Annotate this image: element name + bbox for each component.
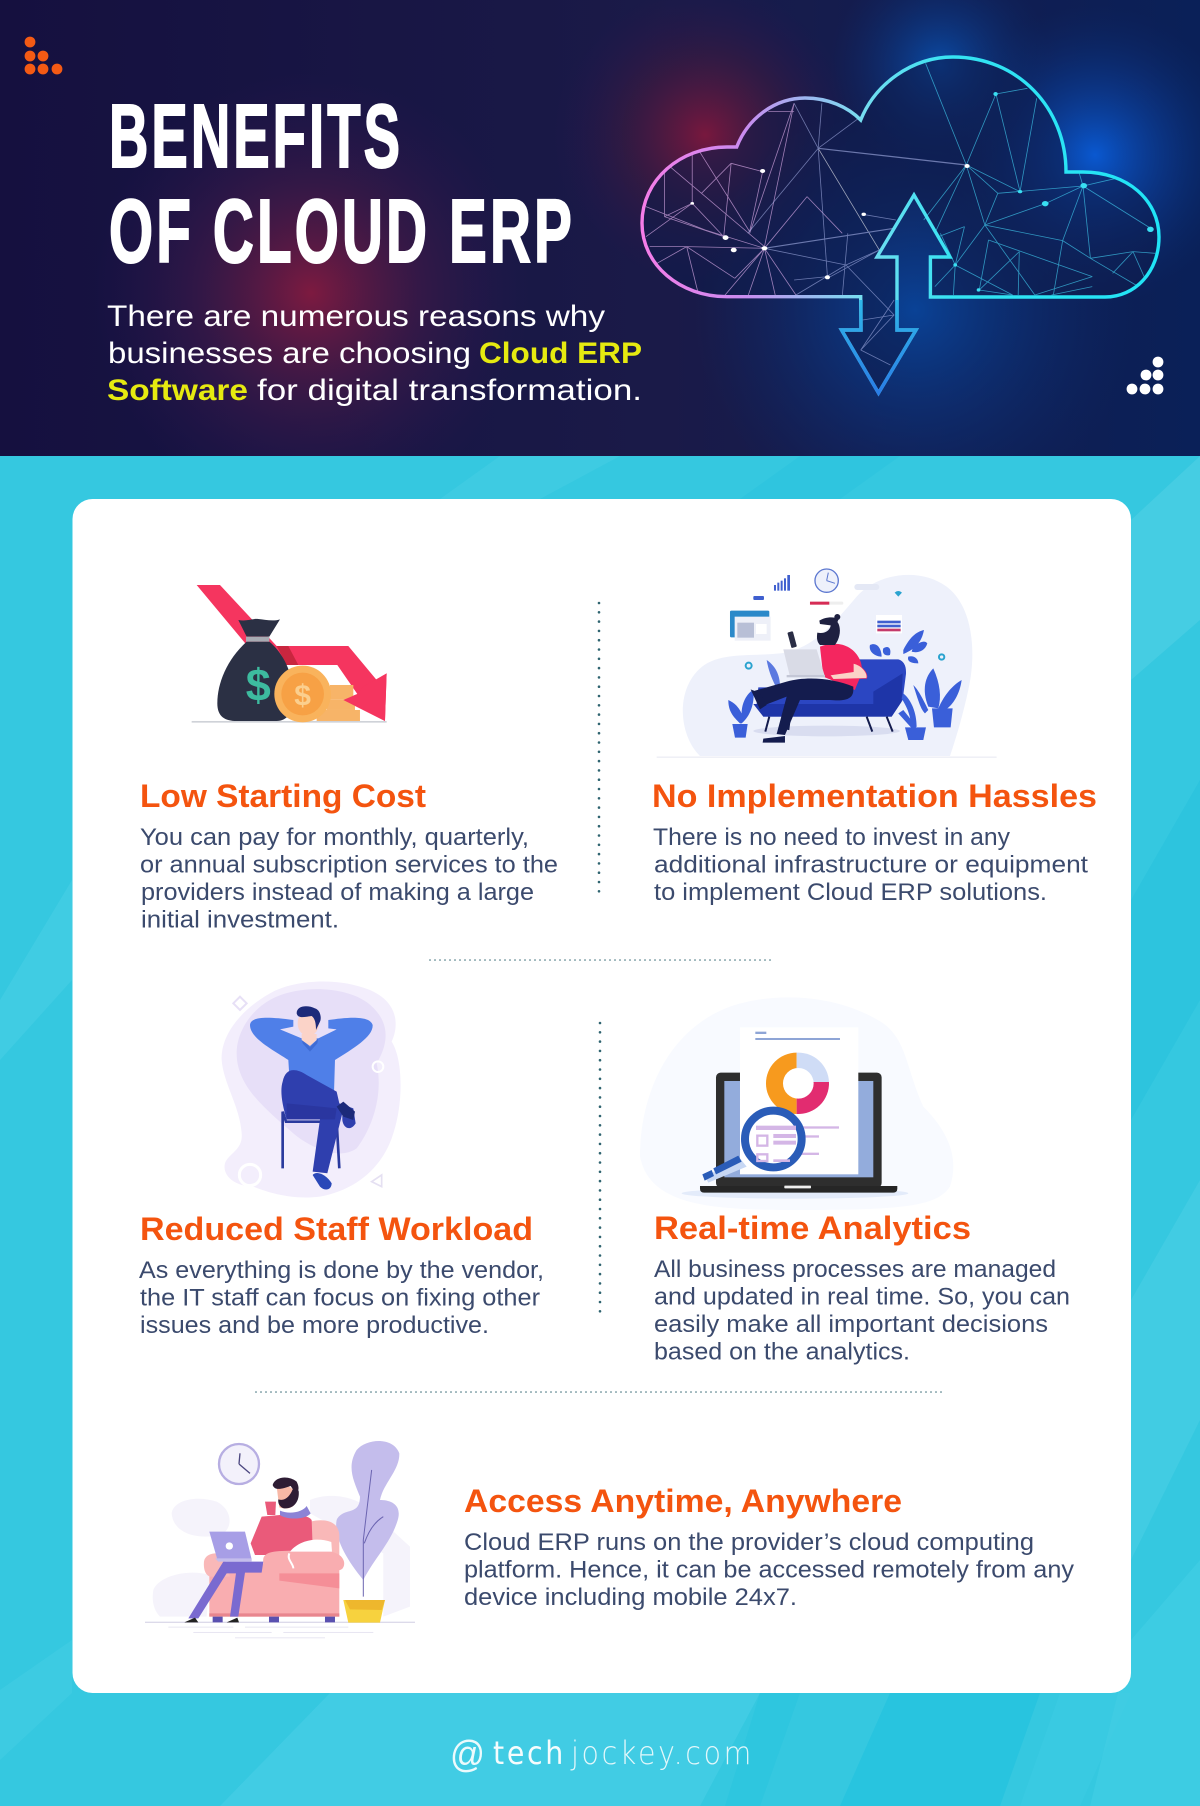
footer: techjockey logo: tech [493, 1734, 566, 1772]
divider dots [256, 603, 944, 1392]
subtitle text: Software [107, 374, 248, 407]
background: cyan streaked panel [0, 456, 1200, 1806]
armchair [310, 1520, 339, 1557]
icon: white dots logo [1127, 357, 1163, 394]
sofa [757, 659, 906, 717]
icon: orange dots logo [25, 37, 62, 74]
cat [290, 1540, 332, 1552]
text block: Low Starting Cost [140, 824, 558, 934]
clock [219, 1444, 259, 1484]
icon: money bag with falling arrow: $ [246, 660, 271, 711]
panel: white card [72, 499, 1131, 1693]
network lines [646, 63, 1155, 365]
cloud illustration with arrows [642, 57, 1159, 393]
icon: laptop with analytics report [640, 997, 953, 1210]
subtitle text: There are numerous reasons why [107, 300, 605, 333]
text block: No Implementation Hassles: There is no need to invest in any [653, 824, 1010, 851]
text block: Low Starting Cost: You can pay for monthly, quarterly, [140, 824, 529, 851]
heading: No Implementation Hassles: No Implementation Hassles [652, 778, 1097, 814]
text block: Real-time Analytics [654, 1256, 1070, 1366]
text block: Low Starting Cost: or annual subscription services to the [140, 852, 558, 878]
icon: man with laptop on armchair [145, 1441, 415, 1638]
chair [283, 1112, 339, 1168]
plant [336, 1441, 399, 1580]
legs [281, 1070, 356, 1173]
header panel [0, 0, 1200, 456]
head [298, 1011, 319, 1036]
footer: techjockey logo: @ [450, 1734, 485, 1776]
text block: Low Starting Cost: providers instead of making a large [141, 879, 534, 906]
title: OF CLOUD ERP [109, 182, 575, 282]
floating icons [815, 569, 838, 592]
title [109, 87, 575, 282]
shirt and arms [250, 1018, 373, 1093]
cloud outline [642, 57, 1159, 393]
person torso [251, 1515, 313, 1555]
footer: techjockey logo: jockey.com [570, 1734, 754, 1772]
icon: relaxed man on chair [222, 982, 401, 1198]
heading: Real-time Analytics: Real-time Analytics [654, 1210, 971, 1246]
subtitle text: for digital transformation. [257, 374, 642, 407]
text block: Access Anytime, Anywhere: Cloud ERP runs on the provider’s cloud computing [464, 1529, 1034, 1556]
footer: techjockey logo [450, 1734, 754, 1776]
text block: No Implementation Hassles: to implement Cloud ERP solutions. [654, 879, 1047, 906]
icon: money bag with falling arrow [192, 585, 387, 723]
subtitle text [107, 300, 642, 407]
text block: Access Anytime, Anywhere: platform. Hence, it can be accessed remotely from any [464, 1556, 1074, 1584]
text block: Real-time Analytics: based on the analytics. [654, 1338, 910, 1366]
text block: Low Starting Cost: initial investment. [141, 906, 339, 934]
text block: No Implementation Hassles: additional infrastructure or equipment [654, 852, 1088, 878]
text block: Reduced Staff Workload: As everything is done by the vendor, [139, 1257, 544, 1284]
plants [728, 630, 962, 740]
text block: No Implementation Hassles [653, 824, 1088, 906]
text block: Real-time Analytics: and updated in real time. So, you can [654, 1284, 1070, 1310]
text block: Real-time Analytics: All business processes are managed [654, 1256, 1056, 1283]
icon: money bag with falling arrow: $ [294, 680, 311, 713]
person [820, 644, 862, 690]
down arrow tint [842, 300, 916, 393]
text block: Access Anytime, Anywhere: device including mobile 24x7. [464, 1584, 797, 1611]
heading: Access Anytime, Anywhere: Access Anytime, Anywhere [464, 1483, 902, 1519]
text block: Real-time Analytics: easily make all important decisions [654, 1311, 1048, 1338]
icon: man on sofa with laptop [657, 569, 997, 758]
text block: Reduced Staff Workload: the IT staff can focus on fixing other [140, 1284, 540, 1312]
text block: Reduced Staff Workload: issues and be more productive. [140, 1312, 489, 1339]
title: BENEFITS [109, 87, 403, 187]
heading: Low Starting Cost: Low Starting Cost [140, 778, 426, 814]
subtitle text: Cloud ERP [479, 337, 642, 370]
heading: Reduced Staff Workload: Reduced Staff Workload [140, 1211, 533, 1247]
text block: Reduced Staff Workload [139, 1257, 544, 1339]
text block: Access Anytime, Anywhere [464, 1529, 1074, 1611]
subtitle text: businesses are choosing [108, 337, 471, 370]
